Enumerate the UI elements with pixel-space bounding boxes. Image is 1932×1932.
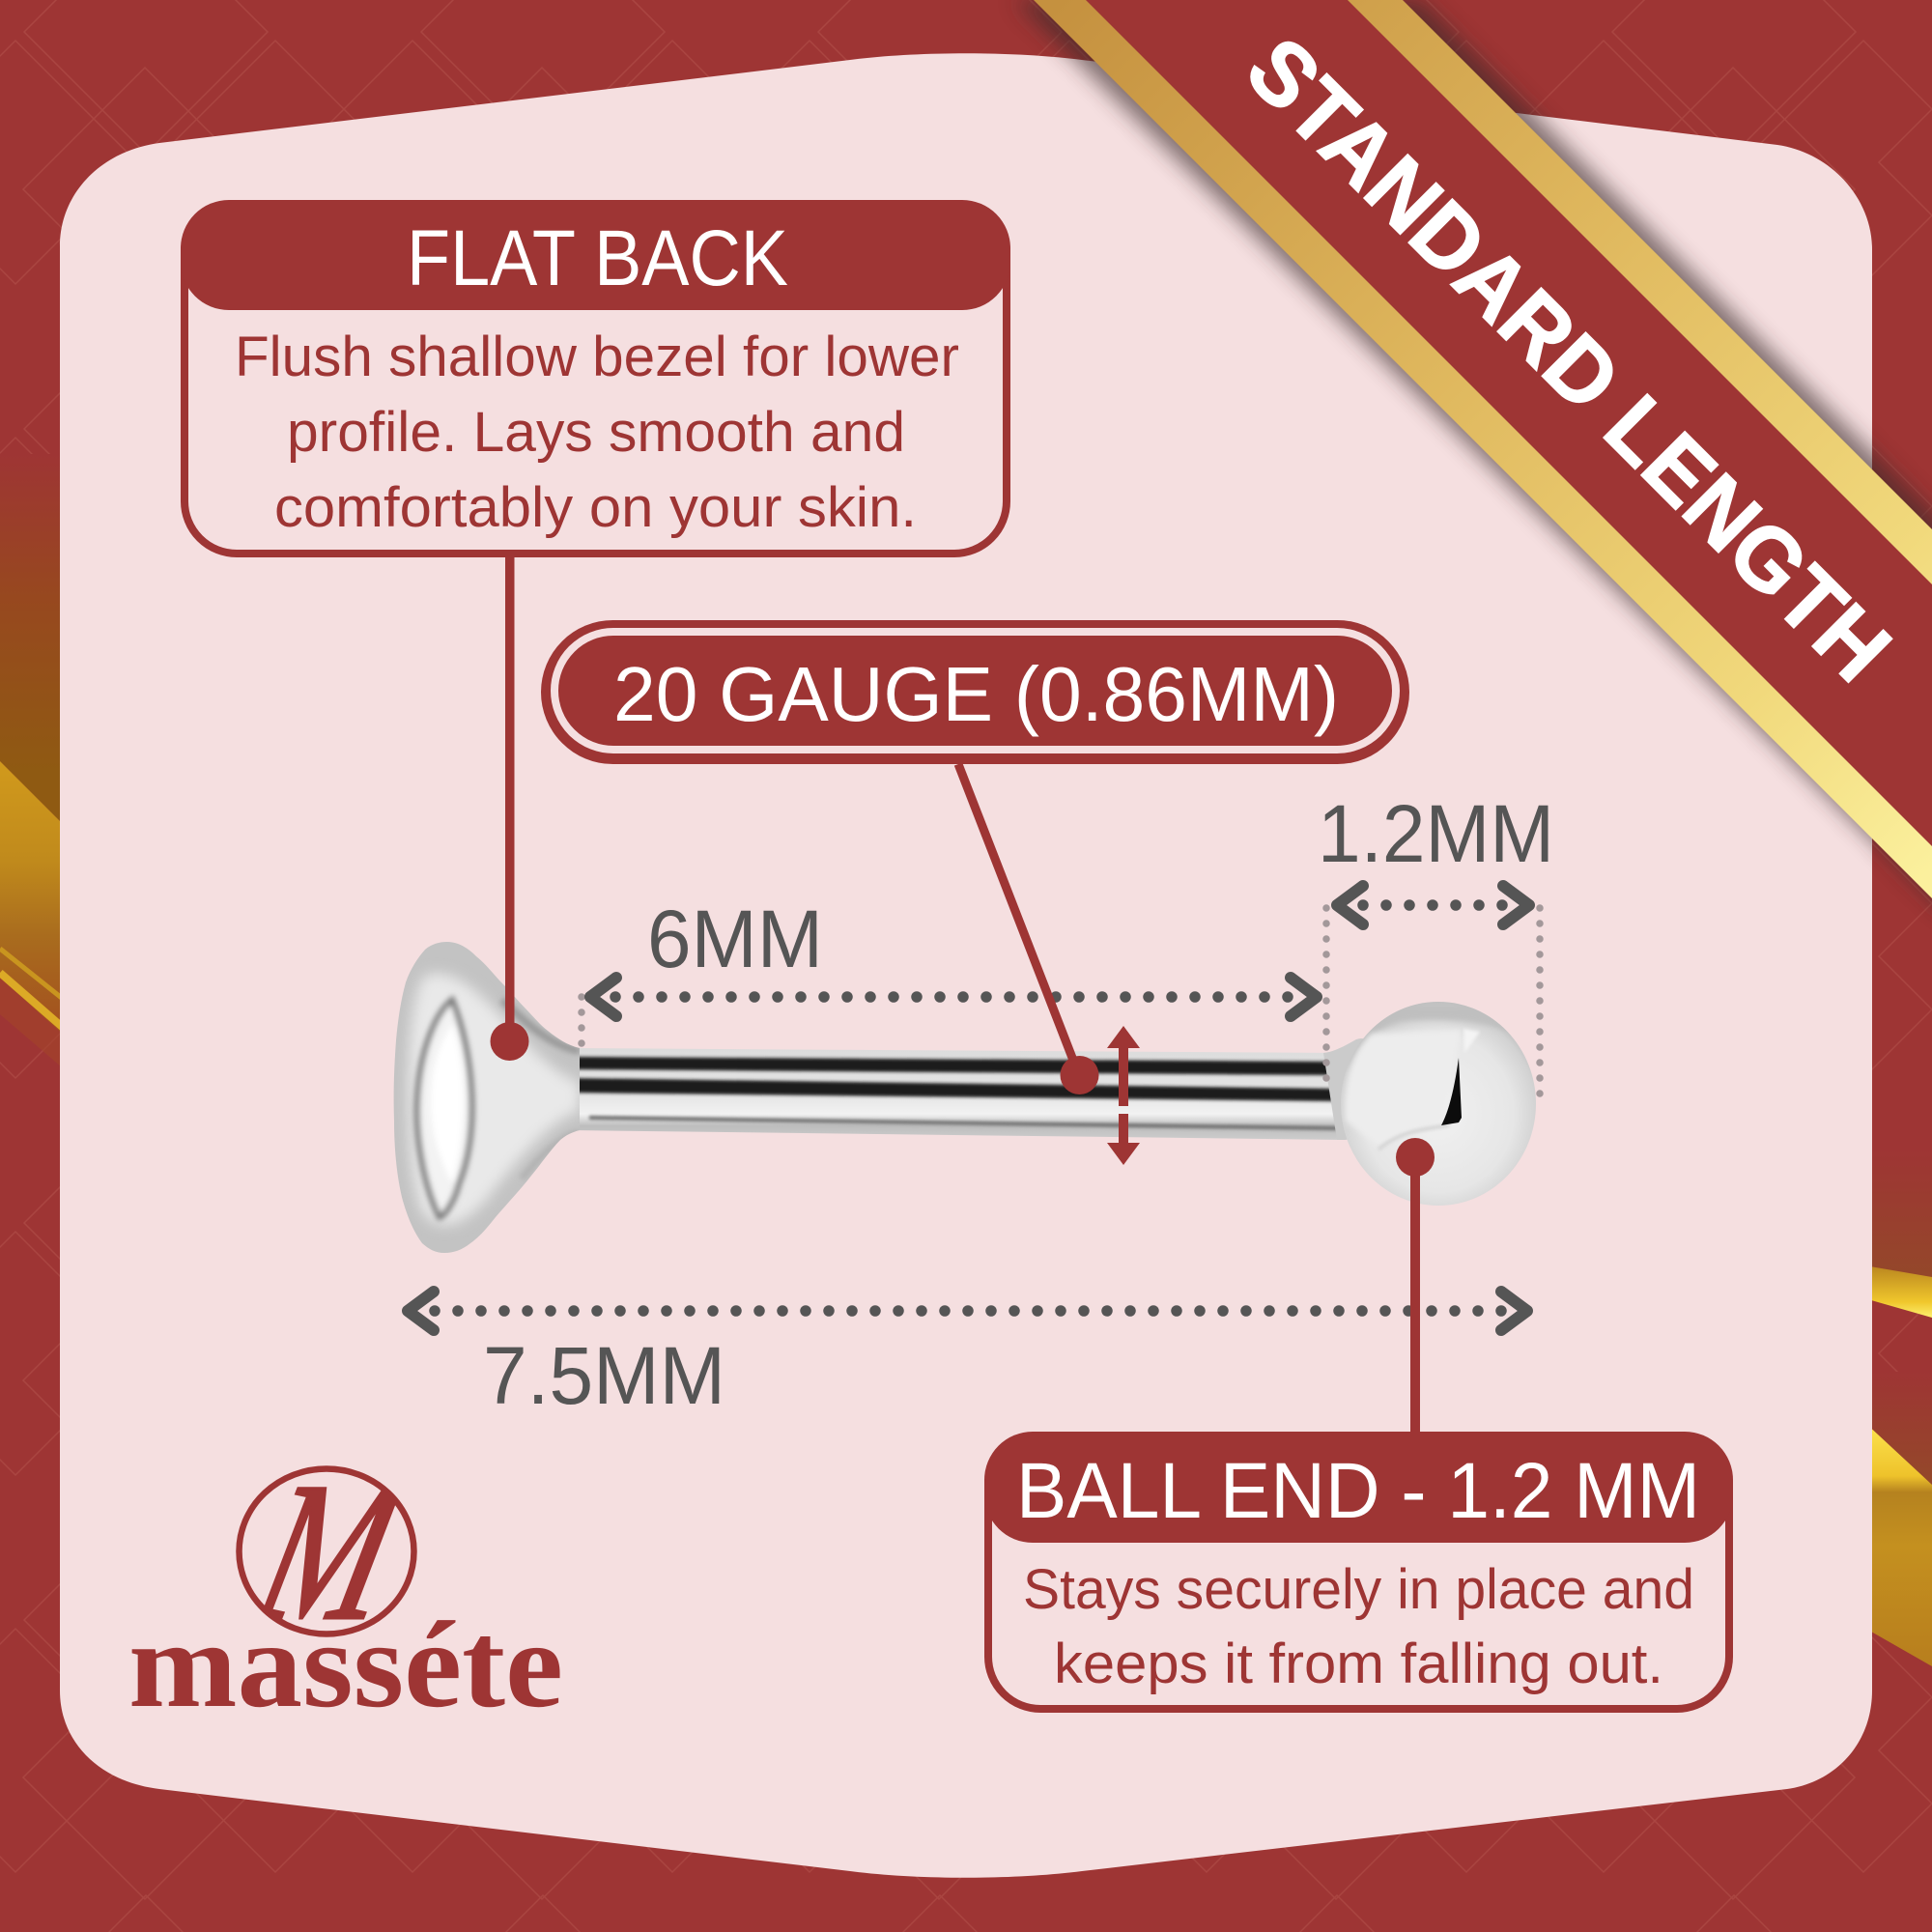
flat back description: comfortably on your skin. — [274, 476, 917, 539]
left gold swoosh — [0, 454, 68, 1072]
callout: flat back — [181, 200, 1010, 554]
logo monogram — [236, 1465, 417, 1637]
leader: ball end — [1396, 1138, 1435, 1435]
ball end description: keeps it from falling out. — [1054, 1633, 1663, 1695]
ribbon red band — [1086, 0, 1932, 846]
flat back header — [181, 200, 1010, 310]
arrow: 7.5mm dimension — [408, 1292, 1527, 1330]
flat back frame — [185, 204, 1007, 554]
ball end heading: BALL END - 1.2 MM — [1016, 1447, 1700, 1535]
ball end frame — [988, 1435, 1729, 1709]
arrow: gauge thickness — [1107, 1026, 1140, 1165]
stud ball end — [1323, 1002, 1536, 1206]
right gold swoosh — [1864, 1150, 1932, 1666]
logo wordmark: masséte — [128, 1596, 563, 1733]
ribbon shadow — [1014, 0, 1932, 918]
dimension guide: vertical dotted extension lines — [582, 908, 1540, 1094]
flat back description: profile. Lays smooth and — [287, 401, 905, 464]
ribbon text: STANDARD LENGTH — [1228, 18, 1910, 700]
leader: flat back — [491, 555, 529, 1061]
stud shaft — [570, 1048, 1343, 1140]
ball end description: Stays securely in place and — [1023, 1558, 1694, 1621]
ball end header — [984, 1432, 1733, 1543]
ribbon gold edges — [1034, 0, 1932, 898]
flat back description — [235, 326, 959, 539]
arrow: 6mm dimension — [590, 978, 1317, 1016]
product: flat back stud earring — [394, 942, 1536, 1253]
arrow: 1.2mm dimension — [1337, 886, 1529, 924]
logo: massete — [131, 1465, 560, 1708]
ball slit — [1441, 1058, 1462, 1125]
ball end description — [1023, 1558, 1694, 1695]
label: 6mm: 6MM — [647, 894, 823, 984]
flat back description: Flush shallow bezel for lower — [235, 326, 959, 388]
ribbon: standard length — [1014, 0, 1932, 918]
label: 1.2mm: 1.2MM — [1318, 788, 1554, 879]
leader: gauge — [958, 764, 1099, 1094]
logo monogram: M — [237, 1443, 424, 1662]
gauge label: 20 GAUGE (0.86MM) — [613, 651, 1339, 737]
flat back heading: FLAT BACK — [407, 214, 788, 302]
callout: ball end — [984, 1432, 1733, 1709]
stud flat head — [394, 942, 580, 1253]
label: 7.5mm: 7.5MM — [483, 1330, 725, 1421]
callout: 20 gauge pill — [541, 620, 1409, 764]
